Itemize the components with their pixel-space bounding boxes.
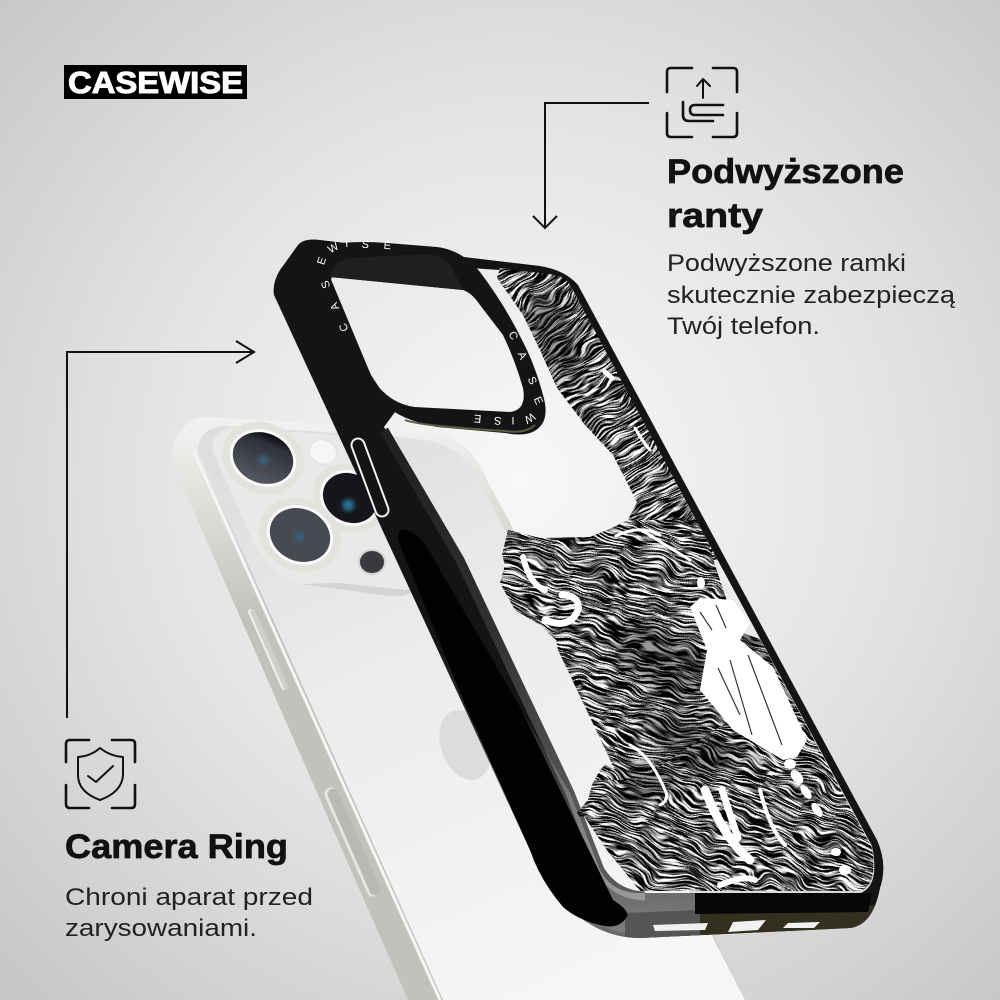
ring lettering left: W bbox=[521, 410, 537, 426]
outer edge grey bbox=[482, 744, 635, 938]
power button bbox=[358, 445, 382, 510]
white phone bbox=[172, 410, 745, 1000]
frame highlight line bbox=[194, 452, 440, 1000]
ring lettering left bbox=[315, 238, 545, 426]
logo: CASEWISE bbox=[68, 65, 243, 100]
phone frame bbox=[172, 417, 745, 1000]
text: camera ring bbox=[65, 884, 313, 942]
text: raised edges bbox=[667, 250, 955, 340]
text: raised edges: skutecznie zabezpieczą bbox=[667, 282, 955, 309]
ring lettering left: A bbox=[515, 350, 529, 362]
case frame bbox=[274, 240, 883, 938]
ring lettering left: S bbox=[494, 414, 502, 426]
ring lettering left: E bbox=[531, 395, 545, 407]
lens 2 bbox=[247, 485, 353, 585]
lens 3 bbox=[301, 450, 399, 546]
ring lettering left: E bbox=[383, 240, 391, 252]
text: raised edges: Podwyższone ramki bbox=[667, 250, 906, 277]
heading: raised edges: ranty bbox=[667, 197, 763, 235]
inner edge grey bbox=[384, 430, 645, 896]
ring lettering left: E bbox=[474, 412, 482, 424]
ring lettering left: S bbox=[361, 239, 369, 251]
text: raised edges: Twój telefon. bbox=[667, 313, 820, 340]
plateau shadow bbox=[300, 583, 415, 596]
text: camera ring: Chroni aparat przed bbox=[65, 884, 313, 911]
beads bbox=[697, 577, 851, 875]
ring highlight bbox=[405, 420, 535, 432]
ring body bbox=[313, 242, 546, 434]
ring lettering right: C bbox=[506, 330, 520, 342]
heading: raised edges: Podwyższone bbox=[667, 153, 904, 191]
hatching: upper section bbox=[497, 268, 718, 560]
ring lettering left: S bbox=[525, 375, 539, 387]
ring lettering left: I bbox=[345, 238, 349, 250]
ring lettering left: C bbox=[337, 321, 351, 333]
heading: camera ring: Camera Ring bbox=[65, 828, 288, 866]
black case bbox=[274, 240, 883, 940]
bottom cutouts bbox=[653, 920, 820, 932]
dress folds bbox=[700, 605, 782, 745]
lens 1 bbox=[211, 410, 315, 506]
phone back face bbox=[198, 426, 745, 1000]
ring lettering left: W bbox=[326, 240, 342, 256]
hatching: middle section bbox=[500, 520, 726, 819]
heading: raised edges bbox=[667, 153, 904, 235]
arrow: raised edges bbox=[533, 103, 649, 228]
dress highlight bbox=[690, 598, 807, 760]
icon: raised edges bbox=[667, 68, 737, 137]
apple logo bbox=[430, 703, 500, 787]
camera ring bbox=[313, 238, 546, 434]
hatching: lower section bbox=[580, 633, 874, 891]
case shading bbox=[384, 430, 880, 940]
white streaks bbox=[523, 372, 785, 885]
sensor bbox=[359, 550, 385, 574]
ring lettering left: E bbox=[315, 255, 329, 266]
tonal shading bbox=[519, 281, 744, 800]
ring lettering left: I bbox=[511, 414, 515, 426]
text: camera ring: zarysowaniami. bbox=[65, 915, 257, 942]
ring lettering left: A bbox=[328, 300, 342, 312]
engraved artwork bbox=[497, 268, 874, 891]
side buttons bbox=[251, 612, 375, 890]
bottom rim bbox=[695, 893, 872, 914]
bottom side face bbox=[640, 905, 880, 940]
side translucency bbox=[447, 668, 695, 937]
flash bbox=[305, 435, 341, 469]
camera plateau bbox=[212, 428, 440, 596]
ring lettering left: S bbox=[319, 278, 333, 290]
icon: shield bbox=[66, 740, 135, 808]
side black strip bbox=[398, 529, 627, 926]
ring inner bevel bbox=[330, 254, 463, 290]
arrow: camera ring bbox=[67, 341, 254, 718]
